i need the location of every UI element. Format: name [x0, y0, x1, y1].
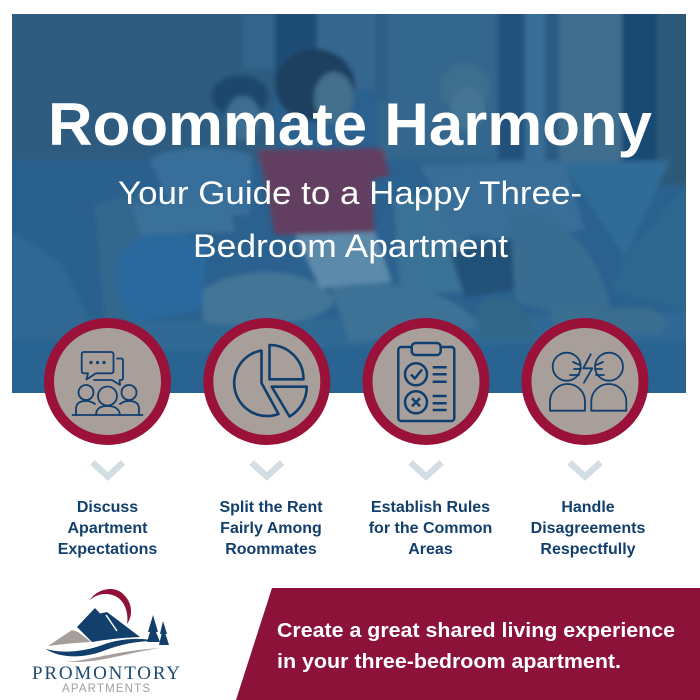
label: step 3 [369, 499, 492, 558]
step 2: split the rent [208, 323, 325, 440]
subtitle [118, 175, 582, 264]
icon: clipboard checklist [398, 343, 454, 421]
label: step 1 [58, 499, 157, 558]
subtitle: Bedroom Apartment [193, 228, 508, 264]
banner: call to action [236, 588, 700, 700]
arrow: chevron 3 [410, 462, 442, 476]
logo grey swoosh [63, 648, 160, 662]
step 3: establish rules [368, 323, 484, 440]
label: step 2: Split the Rent [219, 499, 323, 516]
arrow: chevron 1 [92, 462, 123, 476]
banner text [277, 620, 675, 673]
logo sub-wordmark: APARTMENTS [62, 683, 150, 695]
logo navy mountain [77, 608, 140, 642]
logo wordmark: PROMONTORY [32, 663, 180, 684]
logo: Promontory Apartments [32, 589, 180, 695]
label: step 4: Disagreements [531, 520, 645, 537]
label: step 4: Respectfully [540, 541, 636, 558]
subtitle: Your Guide to a Happy Three- [118, 175, 582, 211]
logo pine trees [147, 615, 169, 645]
title: Roommate Harmony [48, 91, 653, 158]
label: step 2 [219, 499, 323, 558]
icon: dots [89, 361, 106, 364]
label: step 1: Expectations [58, 541, 157, 558]
label: step 3: for the Common [369, 520, 492, 537]
logo navy swoosh [45, 639, 155, 656]
arrow: chevron 4 [570, 462, 600, 476]
icon: group conversation [72, 352, 142, 415]
panel: hero photo background [0, 0, 700, 400]
label: step 4 [531, 499, 645, 558]
banner text: Create a great shared living experience [277, 620, 675, 642]
label: step 1: Apartment [67, 520, 148, 537]
step 1: discuss expectations [49, 323, 166, 440]
icon: two people in conflict [550, 353, 626, 411]
label: step 1: Discuss [77, 499, 138, 516]
label: step 3: Areas [408, 541, 453, 558]
banner text: in your three-bedroom apartment. [277, 651, 621, 673]
arrow: chevron 2 [252, 462, 282, 476]
label: step 2: Fairly Among [220, 520, 322, 537]
label: step 4: Handle [561, 499, 615, 516]
logo mountain highlight [106, 615, 117, 631]
logo grey mountain [48, 630, 91, 646]
logo moon crescent [90, 589, 131, 624]
step 4: handle disagreements [526, 323, 644, 440]
icon: pie chart [234, 345, 307, 416]
label: step 2: Roommates [225, 541, 317, 558]
label: step 3: Establish Rules [371, 499, 490, 516]
